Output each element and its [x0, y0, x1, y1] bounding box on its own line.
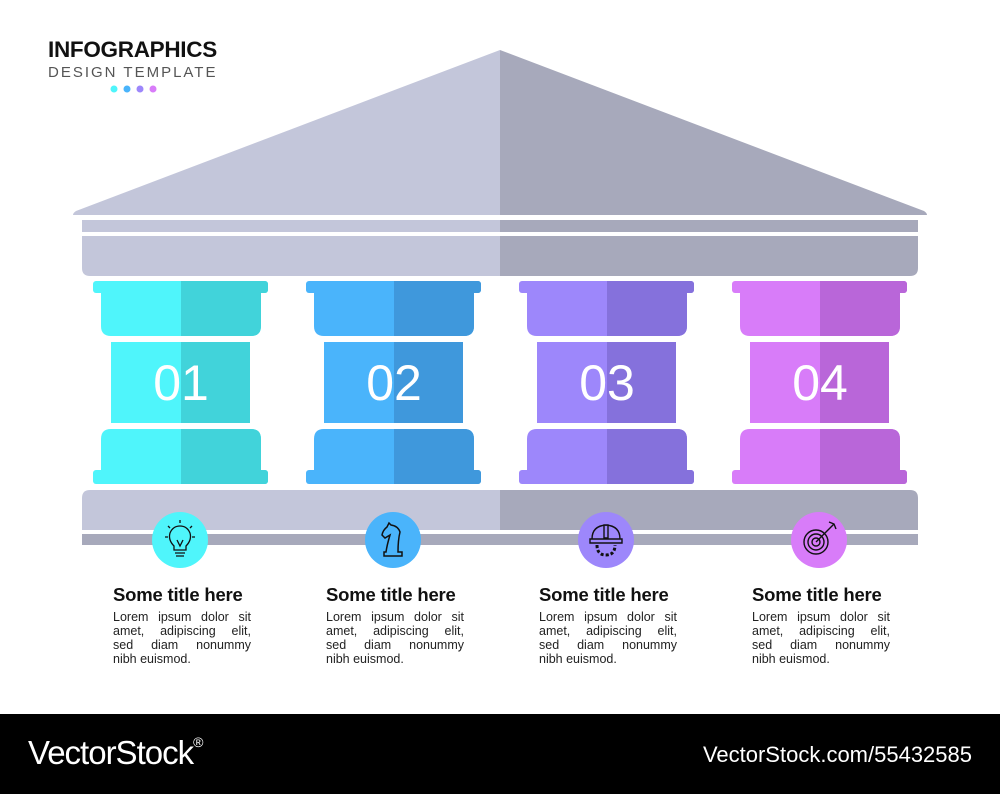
text block 1: Lorem ipsum dolor sit: [113, 610, 251, 624]
text block 3: sed diam nonummy: [539, 638, 677, 652]
text block 2: amet, adipiscing elit,: [326, 624, 464, 638]
text block 4: Some title here: [752, 584, 882, 605]
base platform: [82, 490, 918, 545]
text block 2: Some title here: [326, 584, 456, 605]
footer bar: [0, 714, 1000, 794]
text block 4: sed diam nonummy: [752, 638, 890, 652]
column 3: [519, 281, 694, 484]
header title: INFOGRAPHICS: [48, 37, 217, 62]
text block 1: nibh euismod.: [113, 652, 191, 666]
icon: chess knight: [365, 512, 421, 568]
column 3: 03: [579, 355, 635, 411]
temple illustration: [73, 50, 927, 568]
text block 2: nibh euismod.: [326, 652, 404, 666]
text block 1: [113, 584, 251, 666]
text block 2: [326, 584, 464, 666]
text block 3: amet, adipiscing elit,: [539, 624, 677, 638]
text block 2: Lorem ipsum dolor sit: [326, 610, 464, 624]
text block 4: amet, adipiscing elit,: [752, 624, 890, 638]
text block 2: sed diam nonummy: [326, 638, 464, 652]
header title: DESIGN TEMPLATE: [48, 64, 217, 81]
column 2: [306, 281, 481, 484]
column 1: 01: [153, 355, 209, 411]
column 1: [93, 281, 268, 484]
text block 3: nibh euismod.: [539, 652, 617, 666]
header title: [48, 37, 217, 81]
text block 4: [752, 584, 890, 666]
column 2: 02: [366, 355, 422, 411]
footer bar: VectorStock®: [28, 734, 202, 771]
icon: hard hat gear: [578, 512, 634, 568]
column 4: 04: [792, 355, 848, 411]
column 4: [732, 281, 907, 484]
text block 3: Lorem ipsum dolor sit: [539, 610, 677, 624]
text block 3: Some title here: [539, 584, 669, 605]
text block 4: nibh euismod.: [752, 652, 830, 666]
text block 4: Lorem ipsum dolor sit: [752, 610, 890, 624]
text block 3: [539, 584, 677, 666]
text block 1: amet, adipiscing elit,: [113, 624, 251, 638]
roof: [73, 50, 927, 276]
footer bar: VectorStock.com/55432585: [703, 742, 972, 767]
icon: lightbulb: [152, 512, 208, 568]
text block 1: sed diam nonummy: [113, 638, 251, 652]
icon: target: [791, 512, 847, 568]
header dots: [110, 86, 156, 92]
text block 1: Some title here: [113, 584, 243, 605]
